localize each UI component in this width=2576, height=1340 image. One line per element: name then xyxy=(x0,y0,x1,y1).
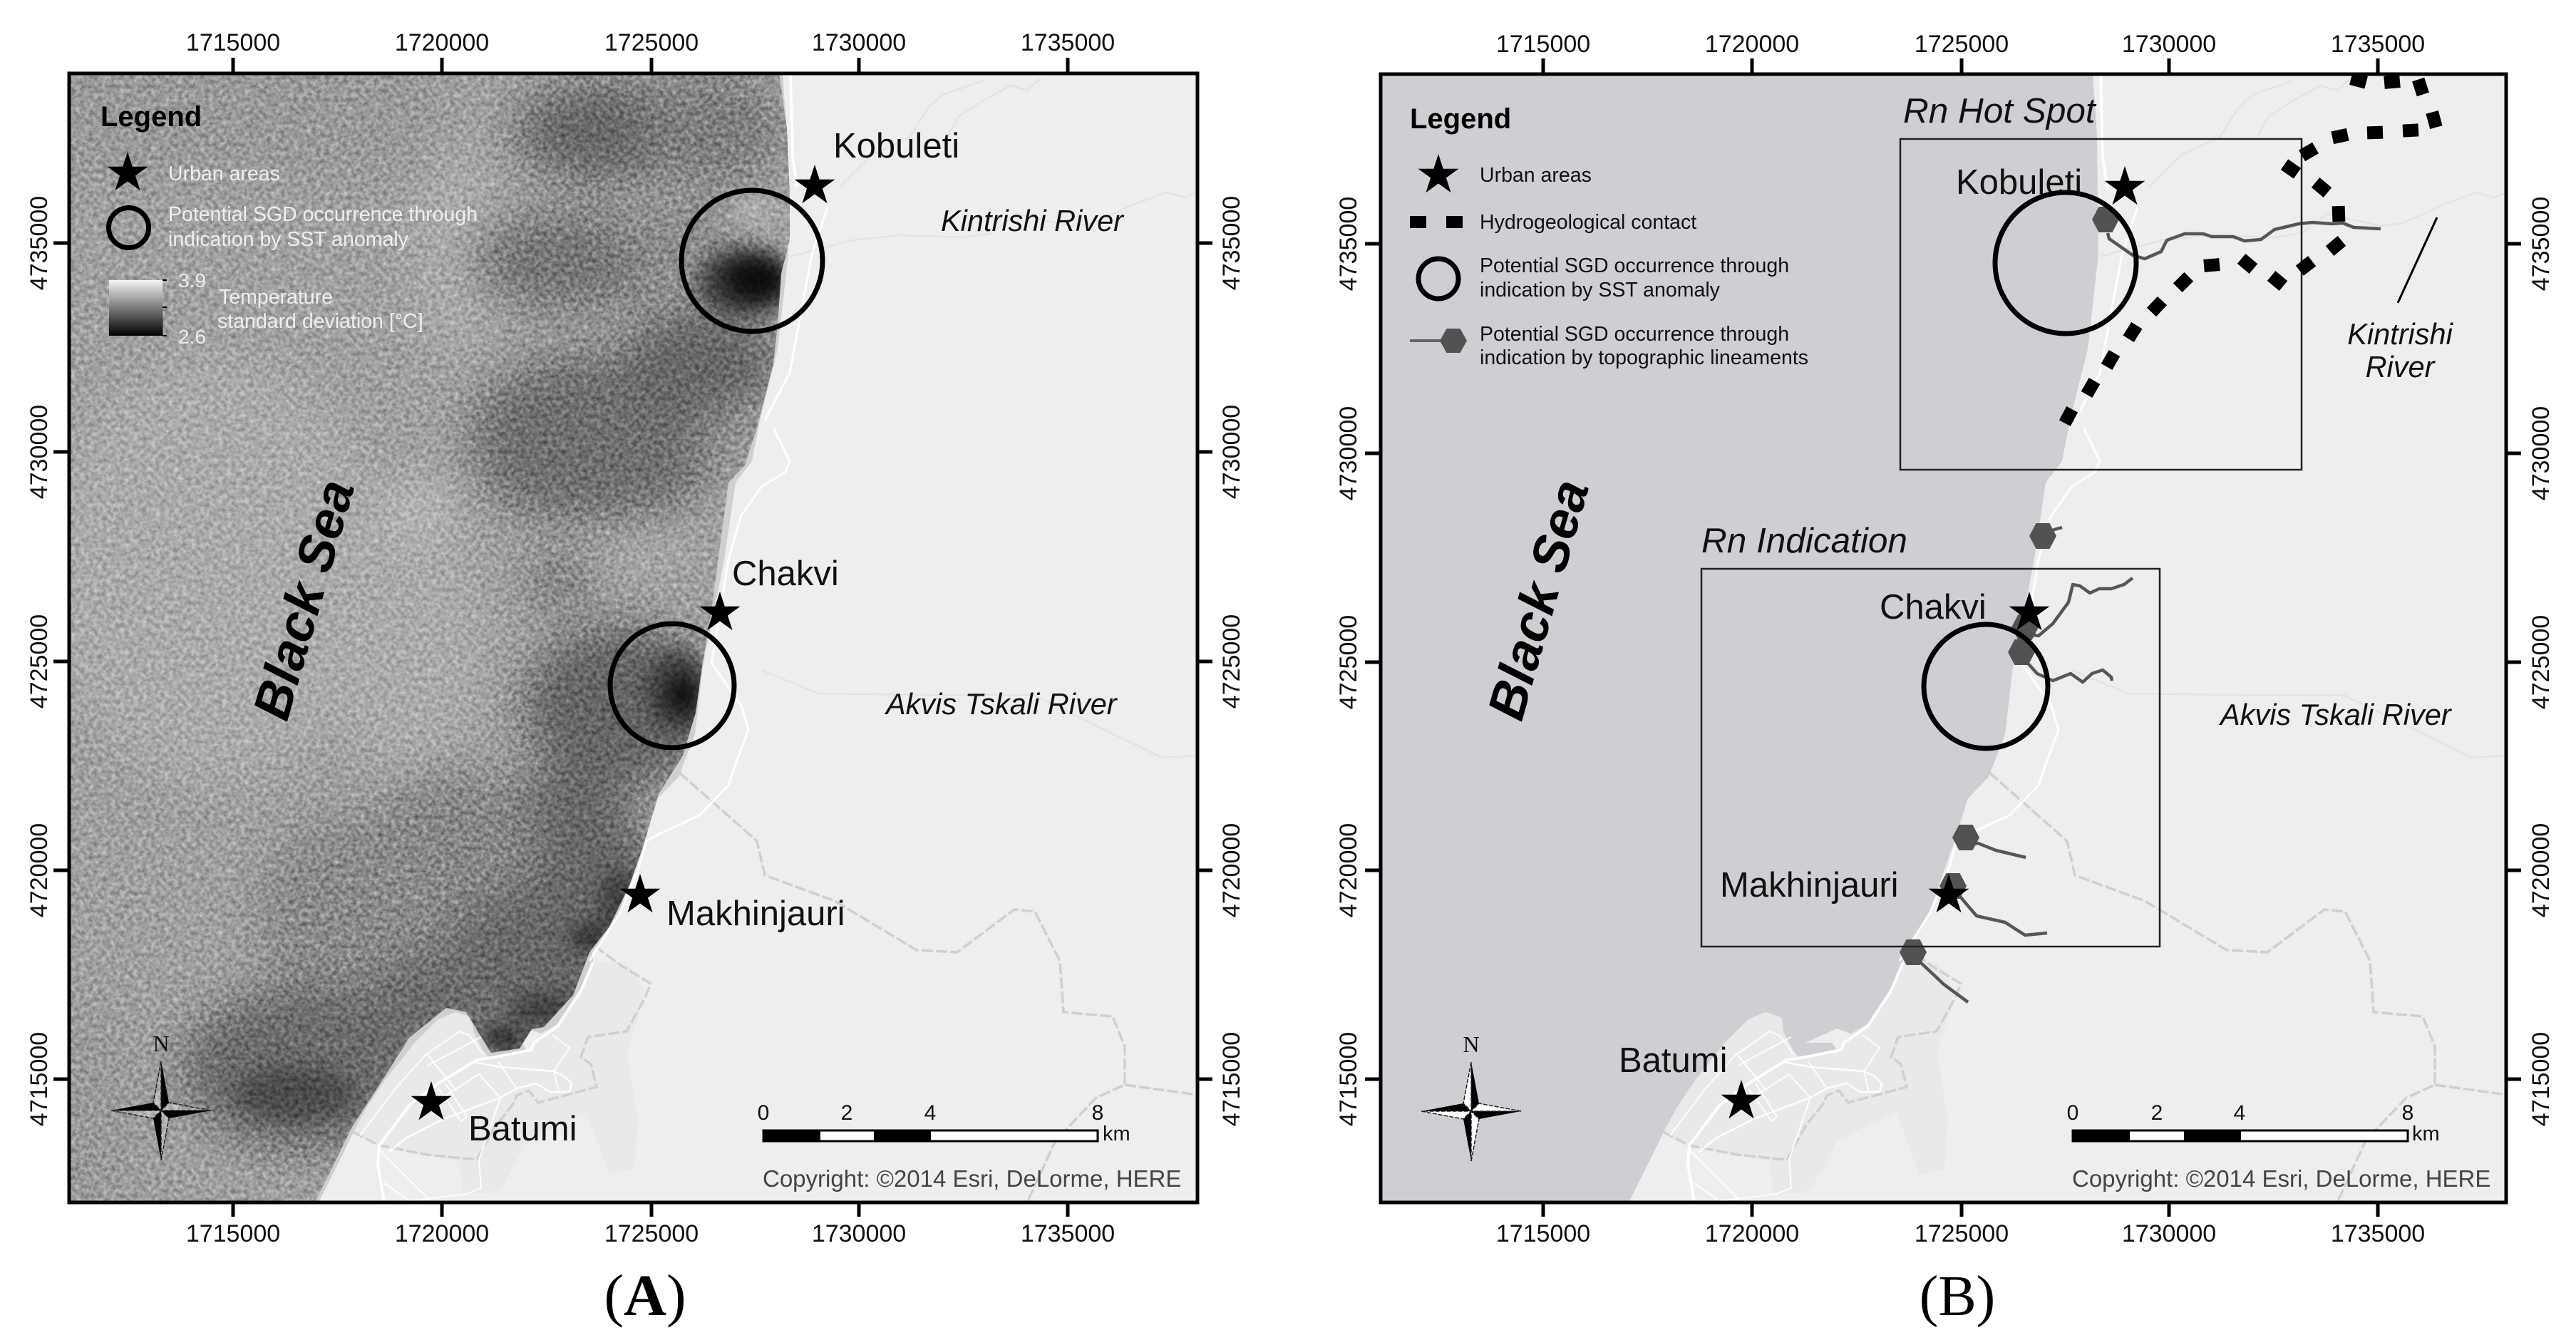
star Kobuleti B xyxy=(2104,166,2145,205)
temperature colour ramp xyxy=(109,280,167,336)
right axis labels A: 4720000 xyxy=(1218,823,1245,917)
top axis labels A: 1735000 xyxy=(1021,29,1115,56)
topographic lineament streams xyxy=(1919,222,2381,1002)
frame B xyxy=(1381,74,2506,1202)
legend text SGD by SST A: Potential SGD occurrence through xyxy=(168,203,478,226)
left axis labels B: 4720000 xyxy=(1335,823,1362,917)
caption B: (B) xyxy=(1920,1265,1995,1328)
legend title A: Legend xyxy=(101,101,202,133)
bottom axis labels B: 1730000 xyxy=(2122,1220,2216,1247)
axis ticks B xyxy=(1365,58,2521,1217)
bottom axis labels B: 1725000 xyxy=(1915,1220,2009,1247)
bottom axis labels B: 1720000 xyxy=(1705,1220,1799,1247)
right axis labels B: 4715000 xyxy=(2528,1032,2555,1126)
top axis labels A: 1725000 xyxy=(604,29,699,56)
scale bar A: 0 xyxy=(758,1101,769,1125)
left axis labels B: 4730000 xyxy=(1335,406,1362,500)
left axis labels A: 4730000 xyxy=(26,405,53,499)
top axis labels B: 1725000 xyxy=(1915,31,2009,58)
Kintrishi pointer line xyxy=(2398,217,2437,303)
map B sea and land base xyxy=(1381,73,2508,1202)
legend text SGD by SST B: Potential SGD occurrence through xyxy=(1480,254,1789,277)
right axis labels A: 4730000 xyxy=(1218,405,1245,499)
right axis labels A: 4735000 xyxy=(1218,196,1245,290)
map A sea and land base xyxy=(316,76,1196,1200)
bottom axis labels A: 1715000 xyxy=(186,1220,280,1247)
scale bar B: 2 xyxy=(2151,1101,2163,1125)
legend title B: Legend xyxy=(1410,103,1511,135)
top axis labels A xyxy=(186,29,1115,56)
right axis labels B xyxy=(2528,197,2555,1126)
legend star A xyxy=(107,152,148,190)
lineament hexagons xyxy=(1900,207,2119,965)
star Batumi A xyxy=(411,1081,452,1120)
north arrow A: N xyxy=(153,1031,170,1056)
Rn Indication box xyxy=(1701,569,2160,947)
top axis labels B: 1735000 xyxy=(2331,31,2425,58)
north arrow B xyxy=(1421,1031,1521,1161)
scale bar A: 4 xyxy=(924,1101,936,1125)
legend star B xyxy=(1418,154,1458,192)
star Chakvi A xyxy=(700,592,740,630)
river label Kintrishi B: River xyxy=(2366,350,2436,383)
raster: temperature standard deviation over sea xyxy=(71,76,790,1200)
legend text urban areas B: Urban areas xyxy=(1480,164,1592,187)
scale bar A xyxy=(758,1101,1130,1145)
river label Kintrishi B: Kintrishi xyxy=(2347,317,2454,351)
star Makhinjauri A xyxy=(620,874,660,912)
left axis labels B: 4725000 xyxy=(1335,615,1362,709)
place label Kobuleti: Kobuleti xyxy=(833,127,959,165)
Rn Hot Spot heading: Rn Hot Spot xyxy=(1903,91,2097,130)
caption A: (A) xyxy=(604,1262,686,1328)
legend contact dashes xyxy=(1410,216,1463,228)
bottom axis labels A xyxy=(186,1220,1115,1247)
copyright B: Copyright: ©2014 Esri, DeLorme, HERE xyxy=(2072,1165,2490,1192)
panel A: SST anomaly map xyxy=(14,29,1254,1328)
scale bar B xyxy=(2067,1101,2440,1145)
legend text SGD by lineaments: indication by topographic lineaments xyxy=(1480,346,1808,369)
river label Akvis Tskali: Akvis Tskali River xyxy=(884,687,1118,721)
top axis labels B xyxy=(1496,31,2425,58)
scale bar B: 4 xyxy=(2234,1101,2245,1125)
bottom axis labels A: 1730000 xyxy=(812,1220,906,1247)
ramp max value: 3.9 xyxy=(178,269,206,292)
top axis labels A: 1715000 xyxy=(186,29,280,56)
star Chakvi B xyxy=(2009,592,2050,630)
Rn Hot Spot box xyxy=(1900,139,2302,470)
right axis labels A: 4725000 xyxy=(1218,614,1245,708)
scale bar B: 8 xyxy=(2402,1101,2413,1125)
left axis labels B: 4735000 xyxy=(1335,197,1362,291)
bottom axis labels A: 1735000 xyxy=(1021,1220,1115,1247)
copyright A: Copyright: ©2014 Esri, DeLorme, HERE xyxy=(763,1165,1181,1192)
place label Chakvi B: Chakvi xyxy=(1880,588,1987,627)
place label Batumi B: Batumi xyxy=(1619,1041,1728,1080)
scale bar B: km xyxy=(2412,1123,2440,1145)
legend B xyxy=(1410,103,1808,369)
legend text SGD by lineaments: Potential SGD occurrence through xyxy=(1480,323,1789,346)
frame A xyxy=(69,73,1197,1202)
river label Akvis Tskali B: Akvis Tskali River xyxy=(2218,698,2453,731)
scale bar A: km xyxy=(1103,1123,1130,1145)
scale bar A: 8 xyxy=(1092,1101,1103,1125)
right axis labels B: 4720000 xyxy=(2528,823,2555,917)
legend text SGD by SST A: indication by SST anomaly xyxy=(168,228,409,251)
top axis labels A: 1730000 xyxy=(812,29,906,56)
legend text SGD by SST B: indication by SST anomaly xyxy=(1480,279,1721,302)
right axis labels B: 4735000 xyxy=(2528,197,2555,291)
axis ticks A xyxy=(53,58,1212,1217)
bottom axis labels A: 1725000 xyxy=(604,1220,699,1247)
place label Makhinjauri: Makhinjauri xyxy=(666,895,845,933)
ramp caption: standard deviation [°C] xyxy=(217,310,423,333)
right axis labels B: 4725000 xyxy=(2528,615,2555,709)
right axis labels B: 4730000 xyxy=(2528,406,2555,500)
left axis labels A: 4715000 xyxy=(26,1032,53,1126)
ramp min value: 2.6 xyxy=(178,326,206,348)
star Makhinjauri B xyxy=(1929,874,1969,912)
place label Chakvi: Chakvi xyxy=(732,555,839,593)
legend A xyxy=(101,101,478,348)
legend circle B xyxy=(1418,259,1458,299)
right axis labels A: 4715000 xyxy=(1218,1032,1245,1126)
left axis labels B xyxy=(1335,197,1362,1126)
scale bar A: 2 xyxy=(841,1101,852,1125)
top axis labels B: 1720000 xyxy=(1705,31,1799,58)
SST anomaly circle Kobuleti B xyxy=(1995,192,2136,334)
panel B: Rn and lineament map xyxy=(1335,31,2555,1328)
place label Makhinjauri B: Makhinjauri xyxy=(1720,866,1899,904)
top axis labels A: 1720000 xyxy=(395,29,489,56)
top axis labels B: 1715000 xyxy=(1496,31,1590,58)
left axis labels A xyxy=(26,196,53,1126)
bottom axis labels B xyxy=(1496,1220,2425,1247)
place label Batumi: Batumi xyxy=(468,1110,577,1148)
north arrow A xyxy=(111,1031,211,1160)
legend circle A xyxy=(108,208,148,248)
Rn Indication heading: Rn Indication xyxy=(1701,521,1907,560)
SST anomaly circle Kobuleti A xyxy=(681,190,823,331)
legend text hydrogeological contact: Hydrogeological contact xyxy=(1480,211,1696,234)
north arrow B: N xyxy=(1463,1031,1480,1057)
left axis labels B: 4715000 xyxy=(1335,1032,1362,1126)
top axis labels B: 1730000 xyxy=(2122,31,2216,58)
star Kobuleti A xyxy=(794,165,835,203)
SST anomaly circle Chakvi A xyxy=(610,624,734,748)
left axis labels A: 4720000 xyxy=(26,823,53,917)
Black Sea label B: Black Sea xyxy=(1477,473,1600,726)
left axis labels A: 4735000 xyxy=(26,196,53,290)
legend text urban areas A: Urban areas xyxy=(168,163,280,185)
SST anomaly circle Chakvi B xyxy=(1924,624,2048,748)
Black Sea label A: Black Sea xyxy=(242,473,366,726)
bottom axis labels B: 1715000 xyxy=(1496,1220,1590,1247)
river label Kintrishi: Kintrishi River xyxy=(941,204,1125,237)
right axis labels A xyxy=(1218,196,1245,1126)
hydrogeological contact dashed line xyxy=(2059,72,2443,426)
bottom axis labels B: 1735000 xyxy=(2331,1220,2425,1247)
place label Kobuleti B: Kobuleti xyxy=(1956,163,2082,202)
left axis labels A: 4725000 xyxy=(26,614,53,708)
scale bar B: 0 xyxy=(2067,1101,2078,1125)
legend lineament symbol xyxy=(1410,329,1467,353)
bottom axis labels A: 1720000 xyxy=(395,1220,489,1247)
star Batumi B xyxy=(1721,1080,1762,1118)
ramp caption: Temperature xyxy=(219,286,333,309)
